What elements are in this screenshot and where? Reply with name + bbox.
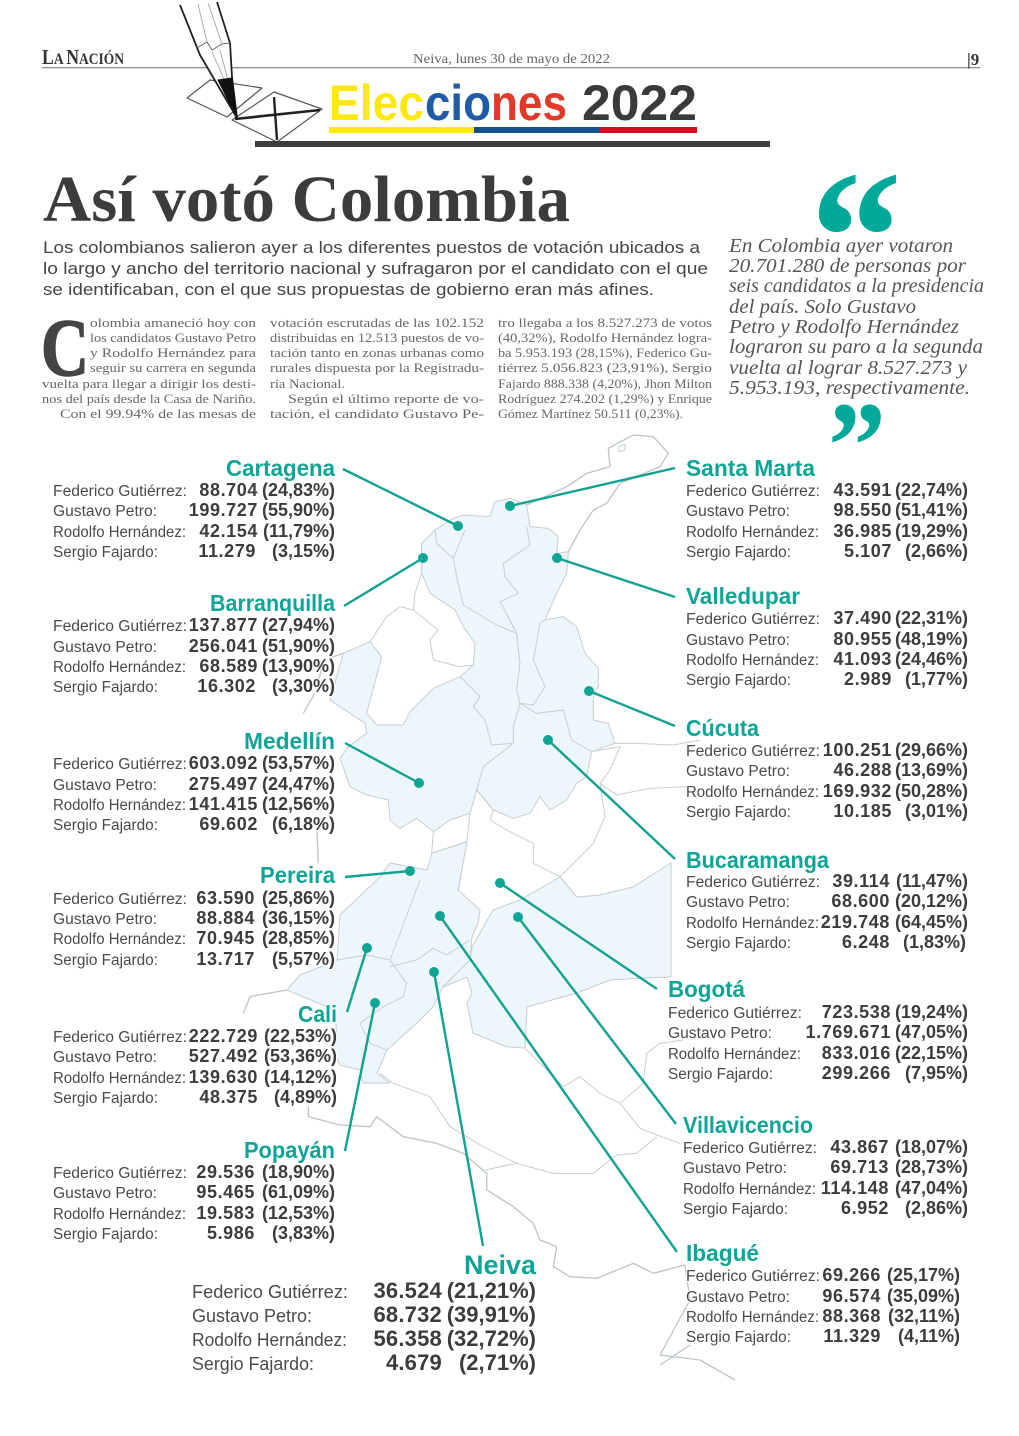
panel: Santa Marta: Santa Marta xyxy=(686,455,815,481)
panel: Cúcuta: Rodolfo Hernández: xyxy=(686,784,819,801)
panel: Santa Marta: (51,41%) xyxy=(895,500,968,520)
panel: Santa Marta xyxy=(686,455,968,561)
panel: Villavicencio: Gustavo Petro: xyxy=(683,1160,787,1177)
panel: Medellín: Medellín xyxy=(244,728,335,754)
panel: Bucaramanga: (20,12%) xyxy=(895,891,968,911)
panel: Barranquilla: Gustavo Petro: xyxy=(53,639,157,656)
body text: three columns: rurales dispuesta por la Registradu- xyxy=(270,361,484,375)
panel: Santa Marta: 43.591 xyxy=(833,480,892,500)
panel: Neiva: (2,71%) xyxy=(459,1350,536,1375)
panel: Cali: 48.375 xyxy=(199,1087,258,1107)
panel: Cúcuta: (29,66%) xyxy=(895,740,968,760)
panel: Medellín: Sergio Fajardo: xyxy=(53,817,158,834)
panel: Popayán: 19.583 xyxy=(196,1203,255,1223)
standfirst text: se identificaban, con el que sus propuestas de gobierno eran más afines. xyxy=(43,280,654,299)
standfirst text xyxy=(43,238,708,299)
panel: Cúcuta: Sergio Fajardo: xyxy=(686,804,791,821)
panel: Cali: 222.729 xyxy=(189,1026,258,1046)
panel: Cúcuta: Gustavo Petro: xyxy=(686,763,790,780)
panel: Cúcuta: Cúcuta xyxy=(686,715,759,741)
panel: Cartagena: (3,15%) xyxy=(272,541,335,561)
panel: Barranquilla: (27,94%) xyxy=(262,615,335,635)
pull quote: Petro y Rodolfo Hernández xyxy=(728,316,959,338)
body text: three columns: ría Nacional. xyxy=(270,377,345,391)
body text: three columns: distribuidas en 12.513 puestos de vo- xyxy=(270,331,484,345)
panel: Barranquilla: 68.589 xyxy=(199,656,258,676)
body text: three columns: Fajardo 888.338 (4,20%), Jhon Milton xyxy=(498,377,713,391)
panel: Pereira: Federico Gutiérrez: xyxy=(53,891,187,908)
body text: three columns xyxy=(41,302,713,421)
panel: Pereira: 88.884 xyxy=(196,908,255,928)
body text: three columns: votación escrutadas de las 102.152 xyxy=(270,316,484,330)
panel: Barranquilla: 137.877 xyxy=(189,615,258,635)
panel: Cartagena: 199.727 xyxy=(189,500,258,520)
panel: Popayán: (18,90%) xyxy=(262,1162,335,1182)
panel: Villavicencio: (47,04%) xyxy=(895,1178,968,1198)
panel: Santa Marta: Sergio Fajardo: xyxy=(686,544,791,561)
panel: Neiva: Rodolfo Hernández: xyxy=(192,1330,347,1350)
panel: Cúcuta: (13,69%) xyxy=(895,760,968,780)
panel: Bogotá: Bogotá xyxy=(668,976,745,1002)
panel: Ibagué: Gustavo Petro: xyxy=(686,1289,790,1306)
panel: Valledupar: (22,31%) xyxy=(895,608,968,628)
section banner: Elecciones 2022: Elec xyxy=(329,75,424,131)
panel: Valledupar: Gustavo Petro: xyxy=(686,632,790,649)
panel: Cartagena: 11.279 xyxy=(198,541,256,561)
panel: Pereira: (5,57%) xyxy=(272,949,335,969)
panel: Cali: (4,89%) xyxy=(274,1087,337,1107)
panel: Popayán: 29.536 xyxy=(196,1162,255,1182)
panel: Neiva: Federico Gutiérrez: xyxy=(192,1282,348,1302)
panel: Bogotá: 723.538 xyxy=(822,1002,891,1022)
panel: Bucaramanga: 68.600 xyxy=(831,891,890,911)
panel: Pereira: Gustavo Petro: xyxy=(53,911,157,928)
body text: three columns: Gómez Martínez 50.511 (0,23%). xyxy=(498,407,683,421)
panel: Barranquilla: Rodolfo Hernández: xyxy=(53,659,186,676)
panel: Pereira: (36,15%) xyxy=(262,908,335,928)
body text: three columns: vuelta para llegar a dirigir los desti- xyxy=(42,377,256,391)
panel: Cali: (22,53%) xyxy=(264,1026,337,1046)
panel: Cali xyxy=(53,1001,337,1107)
panel: Cúcuta: (3,01%) xyxy=(905,801,968,821)
section banner: Elecciones 2022: 2022 xyxy=(582,75,697,131)
panel: Medellín: (6,18%) xyxy=(272,814,335,834)
panel: Neiva: 4.679 xyxy=(386,1350,442,1375)
panel: Barranquilla: Sergio Fajardo: xyxy=(53,679,158,696)
panel: Bucaramanga: (1,83%) xyxy=(903,932,966,952)
panel: Medellín: (24,47%) xyxy=(262,774,335,794)
panel: Cartagena: (24,83%) xyxy=(262,480,335,500)
panel: Bogotá: 299.266 xyxy=(822,1063,891,1083)
panel: Cali: Gustavo Petro: xyxy=(53,1049,157,1066)
map: southern shaded departments xyxy=(287,842,480,1083)
panel: Cartagena: Gustavo Petro: xyxy=(53,503,157,520)
panel: Cartagena: (55,90%) xyxy=(262,500,335,520)
panel: Medellín: (53,57%) xyxy=(262,753,335,773)
panel: Popayán: (61,09%) xyxy=(262,1182,335,1202)
panel: Neiva: Sergio Fajardo: xyxy=(192,1354,314,1374)
panel: Cúcuta: 100.251 xyxy=(823,740,892,760)
panel: Cartagena: (11,79%) xyxy=(263,521,335,541)
panel: Barranquilla: Barranquilla xyxy=(210,590,335,616)
panel: Medellín: Rodolfo Hernández: xyxy=(53,797,186,814)
panel: Bogotá: Gustavo Petro: xyxy=(668,1025,772,1042)
panel: Bucaramanga: (64,45%) xyxy=(895,912,968,932)
map: Amazon tip xyxy=(660,1265,735,1380)
panel: Bucaramanga: 219.748 xyxy=(821,912,890,932)
map of Colombia xyxy=(243,435,735,1380)
body text: three columns: tación tanto en zonas urbanas como xyxy=(270,346,484,360)
section banner: Elecciones 2022: nes xyxy=(491,75,567,131)
panel: Cali: Cali xyxy=(298,1001,337,1027)
panel: Neiva xyxy=(192,1250,537,1375)
pull quote: En Colombia ayer votaron xyxy=(728,235,953,257)
panel: Cali: (53,36%) xyxy=(264,1046,337,1066)
panel: Cartagena xyxy=(53,455,335,561)
panel: Valledupar: 2.989 xyxy=(844,669,892,689)
panel: Neiva: 68.732 xyxy=(374,1302,442,1327)
panel: Pereira: 70.945 xyxy=(196,928,255,948)
panel: Villavicencio: (2,86%) xyxy=(905,1198,968,1218)
panel: Bucaramanga: Bucaramanga xyxy=(686,847,829,873)
panel: Cúcuta: Federico Gutiérrez: xyxy=(686,743,820,760)
panel: Cúcuta: 10.185 xyxy=(833,801,892,821)
panel: Santa Marta: Rodolfo Hernández: xyxy=(686,524,819,541)
panel: Medellín: 69.602 xyxy=(199,814,258,834)
panel: Pereira: 63.590 xyxy=(196,888,255,908)
panel: Valledupar: 41.093 xyxy=(833,649,892,669)
panel: Santa Marta: 36.985 xyxy=(833,521,892,541)
panel: Bucaramanga: Federico Gutiérrez: xyxy=(686,874,820,891)
panel: Ibagué: (25,17%) xyxy=(887,1265,960,1285)
panel: Barranquilla: (13,90%) xyxy=(262,656,335,676)
panel: Bucaramanga: 6.248 xyxy=(842,932,890,952)
icon: pencil marking ballot xyxy=(180,2,322,142)
panel: Ibagué: (4,11%) xyxy=(898,1326,960,1346)
panel: Neiva: (21,21%) xyxy=(447,1278,536,1303)
panel: Villavicencio: (28,73%) xyxy=(895,1157,968,1177)
pull quote xyxy=(728,133,984,516)
panel: Popayán: Gustavo Petro: xyxy=(53,1185,157,1202)
panel: Valledupar: Valledupar xyxy=(686,583,800,609)
pull quote: 20.701.280 de personas por xyxy=(729,255,966,277)
panel: Ibagué: (35,09%) xyxy=(887,1286,960,1306)
panel: Bucaramanga: 39.114 xyxy=(832,871,890,891)
panel: Popayán: 95.465 xyxy=(196,1182,255,1202)
panel: Pereira: (28,85%) xyxy=(262,928,335,948)
body text: three columns: tación, el candidato Gustavo Pe- xyxy=(270,407,484,421)
panel: Cali: Sergio Fajardo: xyxy=(53,1090,158,1107)
panel: Popayán: Federico Gutiérrez: xyxy=(53,1165,187,1182)
body text: three columns: ba 5.953.193 (28,15%), Federico Gu- xyxy=(498,346,712,360)
panel: Medellín xyxy=(53,728,335,834)
logo: La Nación: LA NACIÓN xyxy=(42,45,124,69)
panel: Bucaramanga: Sergio Fajardo: xyxy=(686,935,791,952)
standfirst text: lo largo y ancho del territorio nacional y sufragaron por el candidato con el que xyxy=(43,259,708,278)
body text: three columns: Rodríguez 274.202 (1,29%) y Enrique xyxy=(498,392,712,406)
panel: Ibagué: Rodolfo Hernández: xyxy=(686,1309,819,1326)
panel: Ibagué: Ibagué xyxy=(686,1240,759,1266)
panel: Bucaramanga xyxy=(686,847,968,952)
panel: Barranquilla: (51,90%) xyxy=(262,636,335,656)
body text: three columns: tiérrez 5.056.823 (23,91%), Sergio xyxy=(498,361,712,375)
section banner: Elecciones 2022 xyxy=(255,75,770,147)
leader lines and location dots xyxy=(343,468,677,1252)
panel: Ibagué: Federico Gutiérrez: xyxy=(686,1268,820,1285)
panel: Medellín: 275.497 xyxy=(189,774,258,794)
panel: Ibagué: 96.574 xyxy=(822,1286,881,1306)
map: northern shaded departments xyxy=(330,498,700,897)
panel: Cartagena: Rodolfo Hernández: xyxy=(53,524,186,541)
panel: Bogotá: Rodolfo Hernández: xyxy=(668,1046,801,1063)
panel: Pereira: Rodolfo Hernández: xyxy=(53,931,186,948)
panel: Neiva: Neiva xyxy=(464,1250,537,1280)
panel: Bogotá: (19,24%) xyxy=(895,1002,968,1022)
panel: Santa Marta: 98.550 xyxy=(833,500,892,520)
panel: Bogotá: 833.016 xyxy=(822,1043,891,1063)
pull quote: 5.953.193, respectivamente. xyxy=(729,377,970,399)
panel: Barranquilla: 256.041 xyxy=(189,636,258,656)
panel: Popayán: (12,53%) xyxy=(262,1203,335,1223)
panel: Villavicencio: 114.148 xyxy=(821,1178,889,1198)
panel: Cali: (14,12%) xyxy=(264,1067,337,1087)
panel: Bucaramanga: Rodolfo Hernández: xyxy=(686,915,819,932)
body text: three columns: Según el último reporte de vo- xyxy=(288,392,484,406)
panel: Ibagué xyxy=(686,1240,960,1346)
map: national border south xyxy=(243,990,685,1278)
body text: three columns: (40,32%), Rodolfo Hernández logra- xyxy=(498,331,712,345)
panel: Santa Marta: 5.107 xyxy=(844,541,892,561)
panel: Villavicencio: 69.713 xyxy=(830,1157,889,1177)
panel: Barranquilla: Federico Gutiérrez: xyxy=(53,618,187,635)
body text: three columns: Con el 99.94% de las mesas de xyxy=(60,407,257,421)
panel: Barranquilla: 16.302 xyxy=(197,676,256,696)
panel: Bucaramanga: Gustavo Petro: xyxy=(686,894,790,911)
panel: Santa Marta: (2,66%) xyxy=(905,541,968,561)
panel: Cartagena: Sergio Fajardo: xyxy=(53,544,158,561)
panel: Valledupar: (24,46%) xyxy=(895,649,968,669)
date line: Neiva, lunes 30 de mayo de 2022 xyxy=(413,52,610,67)
body text: three columns: olombia amaneció hoy con xyxy=(90,316,257,330)
panel: Ibagué: 69.266 xyxy=(822,1265,881,1285)
pull quote: seis candidatos a la presidencia xyxy=(729,275,984,297)
panel: Villavicencio: Rodolfo Hernández: xyxy=(683,1181,816,1198)
panel: Pereira: (25,86%) xyxy=(262,888,335,908)
panel: Cúcuta xyxy=(686,715,968,821)
panel: Cartagena: 88.704 xyxy=(199,480,258,500)
panel: Popayán xyxy=(53,1137,335,1243)
panel: Barranquilla xyxy=(53,590,335,696)
panel: Popayán: Sergio Fajardo: xyxy=(53,1226,158,1243)
body text: three columns: nos del país desde la Casa de Nariño. xyxy=(42,392,256,406)
panel: Villavicencio: Villavicencio xyxy=(683,1112,813,1138)
panel: Medellín: Federico Gutiérrez: xyxy=(53,756,187,773)
panel: Pereira: Sergio Fajardo: xyxy=(53,952,158,969)
section banner: Elecciones 2022: cio xyxy=(425,75,491,131)
page number: |9 xyxy=(967,50,979,69)
panel: Medellín: Gustavo Petro: xyxy=(53,777,157,794)
panel: Pereira: Pereira xyxy=(260,862,335,888)
panel: Cartagena: Federico Gutiérrez: xyxy=(53,483,187,500)
panel: Cali: Federico Gutiérrez: xyxy=(53,1029,187,1046)
panel: Bogotá: (7,95%) xyxy=(905,1063,968,1083)
panel: Ibagué: 11.329 xyxy=(823,1326,881,1346)
panel: Villavicencio: Sergio Fajardo: xyxy=(683,1201,788,1218)
panel: Bogotá xyxy=(668,976,968,1083)
pull quote: del país. Solo Gustavo xyxy=(729,296,916,318)
panel: Neiva: Gustavo Petro: xyxy=(192,1306,312,1326)
drop cap: C xyxy=(41,302,89,393)
pull quote: lograron su paro a la segunda xyxy=(729,336,983,358)
panel: Bogotá: (22,15%) xyxy=(895,1043,968,1063)
map: inner southern borders xyxy=(243,880,685,1278)
panel: Cali: Rodolfo Hernández: xyxy=(53,1070,186,1087)
panel: Villavicencio: 6.952 xyxy=(841,1198,889,1218)
standfirst text: Los colombianos salieron ayer a los diferentes puestos de votación ubicados a xyxy=(43,238,701,257)
panel: Cúcuta: 46.288 xyxy=(833,760,892,780)
map: national border north and Guajira xyxy=(303,435,668,863)
panel: Cúcuta: (50,28%) xyxy=(895,781,968,801)
panel: Pereira: 13.717 xyxy=(196,949,255,969)
panel: Valledupar: Rodolfo Hernández: xyxy=(686,652,819,669)
pull quote: vuelta al lograr 8.527.273 y xyxy=(729,357,967,379)
icon: closing quotation mark: ” xyxy=(828,378,886,516)
panel: Cali: 527.492 xyxy=(189,1046,258,1066)
panel: Popayán: (3,83%) xyxy=(272,1223,335,1243)
panel: Santa Marta: (19,29%) xyxy=(895,521,968,541)
panel: Neiva: (32,72%) xyxy=(447,1326,536,1351)
panel: Cali: 139.630 xyxy=(189,1067,258,1087)
icon: opening quotation mark: “ xyxy=(810,133,902,343)
title: Así votó Colombia xyxy=(43,163,570,236)
panel: Bogotá: (47,05%) xyxy=(895,1022,968,1042)
panel: Villavicencio: 43.867 xyxy=(830,1137,889,1157)
panel: Villavicencio xyxy=(683,1112,968,1218)
panel: Valledupar: 80.955 xyxy=(833,629,892,649)
panel: Bogotá: 1.769.671 xyxy=(806,1022,891,1042)
panel: Valledupar: (1,77%) xyxy=(905,669,968,689)
panel: Villavicencio: Federico Gutiérrez: xyxy=(683,1140,817,1157)
header: newspaper masthead xyxy=(42,45,980,69)
panel: Neiva: 36.524 xyxy=(374,1278,443,1303)
panel: Popayán: 5.986 xyxy=(207,1223,255,1243)
body text: three columns: los candidatos Gustavo Petro xyxy=(90,331,256,345)
panel: Valledupar: Sergio Fajardo: xyxy=(686,672,791,689)
panel: Cúcuta: 169.932 xyxy=(823,781,892,801)
panel: Medellín: 603.092 xyxy=(189,753,258,773)
panel: Ibagué: Sergio Fajardo: xyxy=(686,1329,791,1346)
panel: Valledupar: 37.490 xyxy=(833,608,892,628)
panel: Villavicencio: (18,07%) xyxy=(895,1137,968,1157)
panel: Valledupar: (48,19%) xyxy=(895,629,968,649)
panel: Medellín: 141.415 xyxy=(189,794,258,814)
panel: Santa Marta: Gustavo Petro: xyxy=(686,503,790,520)
panel: Medellín: (12,56%) xyxy=(262,794,335,814)
panel: Popayán: Popayán xyxy=(244,1137,335,1163)
panel: Cartagena: 42.154 xyxy=(199,521,258,541)
body text: three columns: seguir su carrera en segunda xyxy=(90,361,256,375)
panel: Bucaramanga: (11,47%) xyxy=(896,871,968,891)
panel: Barranquilla: (3,30%) xyxy=(272,676,335,696)
panel: Neiva: (39,91%) xyxy=(447,1302,536,1327)
panel: Ibagué: 88.368 xyxy=(822,1306,881,1326)
panel: Santa Marta: Federico Gutiérrez: xyxy=(686,483,820,500)
panel: Bogotá: Federico Gutiérrez: xyxy=(668,1005,802,1022)
body text: three columns: tro llegaba a los 8.527.273 de votos xyxy=(498,316,712,330)
panel: Neiva: 56.358 xyxy=(374,1326,442,1351)
panel: Pereira xyxy=(53,862,335,969)
panel: Popayán: Rodolfo Hernández: xyxy=(53,1206,186,1223)
body text: three columns: y Rodolfo Hernández para xyxy=(90,346,257,360)
panel: Santa Marta: (22,74%) xyxy=(895,480,968,500)
panel: Ibagué: (32,11%) xyxy=(888,1306,960,1326)
panel: Cartagena: Cartagena xyxy=(226,455,335,481)
panel: Valledupar xyxy=(686,583,968,689)
panel: Valledupar: Federico Gutiérrez: xyxy=(686,611,820,628)
panel: Bogotá: Sergio Fajardo: xyxy=(668,1066,773,1083)
